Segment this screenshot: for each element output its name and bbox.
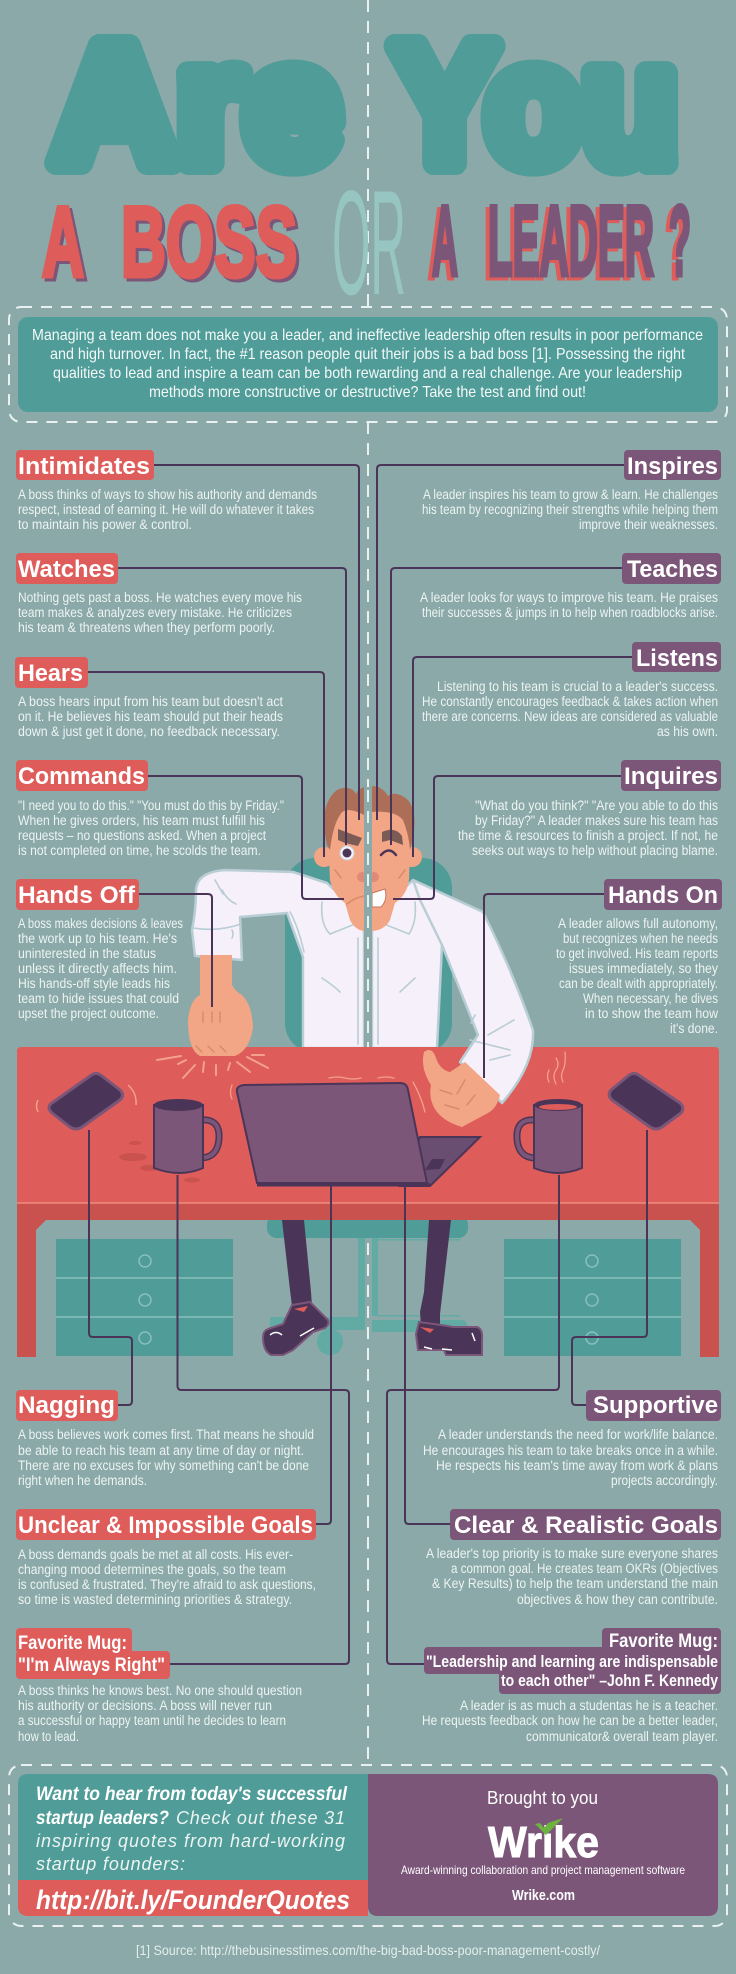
title: A Leader?: A bbox=[428, 188, 454, 299]
leader: hands on: A leader allows full autonomy, bbox=[558, 916, 718, 931]
boss: unclear and impossible goals: changing mood determines the goals, so the team bbox=[18, 1562, 286, 1577]
legs and shoes bbox=[263, 1220, 482, 1355]
center gutter bbox=[364, 787, 372, 1049]
boss: favorite mug: "I'm Always Right" bbox=[18, 1655, 165, 1676]
leader: inspires bbox=[422, 450, 721, 532]
boss: hands off: team to hide issues that could bbox=[18, 991, 179, 1006]
icon: fist with impact marks bbox=[157, 955, 268, 1078]
leader: clear and realistic goals: Clear & Realistic Goals bbox=[454, 1512, 718, 1539]
boss: commands: "I need you to do this." "You must do this by Friday." bbox=[18, 798, 284, 813]
title: A Boss: BOSS bbox=[121, 186, 297, 297]
link: http://bit.ly/FounderQuotes bbox=[36, 1885, 350, 1915]
boss: commands: When he gives orders, his team must fulfill his bbox=[18, 813, 265, 828]
boss: nagging: be able to reach his team at any time of day or night. bbox=[18, 1443, 304, 1458]
leader: favorite mug: Favorite Mug: bbox=[609, 1631, 718, 1652]
connector lines bbox=[88, 465, 647, 1664]
boss: hears: Hears bbox=[18, 660, 83, 687]
leader: hands on: issues immediately, so they bbox=[569, 961, 718, 976]
boss: hears bbox=[15, 657, 283, 739]
leader: clear and realistic goals bbox=[426, 1509, 721, 1607]
boss: nagging: right when he demands. bbox=[18, 1473, 147, 1488]
leader: teaches bbox=[420, 553, 721, 620]
title: Are You: You bbox=[392, 10, 678, 200]
leader: inquires: Inquires bbox=[624, 763, 718, 790]
boss: hands off: upset the project outcome. bbox=[18, 1006, 159, 1021]
boss: intimidates: respect, instead of earning it. He will do whatever it takes bbox=[18, 502, 314, 517]
boss: intimidates: A boss thinks of ways to show his authority and demands bbox=[18, 487, 317, 502]
boss: commands: requests – no questions asked. When a project bbox=[18, 828, 266, 843]
sponsor bbox=[368, 1774, 718, 1916]
boss: hands off: His hands-off style leads his bbox=[18, 976, 170, 991]
source note: [1] Source: http://thebusinesstimes.com/the-big-bad-boss-poor-management-costly/ bbox=[136, 1942, 600, 1958]
icon: left phone bbox=[36, 1074, 136, 1129]
title: Are You bbox=[52, 10, 678, 200]
call to action: inspiring quotes from hard-working bbox=[36, 1831, 345, 1851]
boss: watches bbox=[16, 553, 302, 635]
boss: intimidates: Intimidates bbox=[18, 453, 150, 480]
boss: hears: down & just get it done, no feedback necessary. bbox=[18, 724, 280, 739]
boss: unclear and impossible goals: is confused & frustrated. They're afraid to ask questions, bbox=[18, 1577, 316, 1592]
icon: laptop bbox=[230, 1077, 480, 1186]
boss: unclear and impossible goals: Unclear & Impossible Goals bbox=[18, 1512, 313, 1539]
logo: Wrike: Wrike bbox=[488, 1818, 599, 1867]
leader: inspires: Inspires bbox=[627, 453, 718, 480]
boss: commands bbox=[16, 760, 284, 858]
sponsor: Award-winning collaboration and project management software bbox=[401, 1863, 685, 1877]
icon: right phone bbox=[609, 1074, 683, 1129]
leader: hands on: it's done. bbox=[670, 1021, 718, 1036]
leader: listens: Listens bbox=[636, 645, 718, 672]
panel: introduction: methods more constructive or destructive? Take the test and find out! bbox=[149, 384, 586, 401]
icon: thumbs hand bbox=[423, 1050, 500, 1127]
icon: left mug bbox=[154, 1099, 219, 1173]
boss: watches: his team & threatens when they perform poorly. bbox=[18, 620, 275, 635]
leader: clear and realistic goals: objectives & how they can contribute. bbox=[517, 1592, 718, 1607]
call to action: startup leaders? bbox=[36, 1808, 169, 1829]
boss: nagging bbox=[16, 1390, 314, 1488]
text: OR bbox=[332, 159, 406, 326]
boss: unclear and impossible goals: so time is wasted determining priorities & strategy. bbox=[18, 1592, 292, 1607]
call to action: Want to hear from today's successful bbox=[36, 1784, 348, 1805]
boss: favorite mug: his authority or decisions. A boss will never run bbox=[18, 1698, 272, 1713]
boss: watches: Nothing gets past a boss. He watches every move his bbox=[18, 590, 302, 605]
title: A Leader? bbox=[428, 185, 691, 299]
leader: supportive: projects accordingly. bbox=[611, 1473, 718, 1488]
leader: hands on bbox=[556, 879, 722, 1036]
leader: listens bbox=[422, 642, 721, 739]
text: ? bbox=[665, 188, 687, 299]
boss: favorite mug: Favorite Mug: bbox=[18, 1633, 127, 1654]
sponsor: Brought to you bbox=[487, 1788, 598, 1808]
call to action: startup founders: bbox=[36, 1854, 185, 1874]
desk bbox=[17, 1047, 719, 1357]
boss: nagging: A boss believes work comes first. That means he should bbox=[18, 1427, 314, 1442]
leader: inquires: "What do you think?" "Are you able to do this bbox=[475, 798, 718, 813]
leader: inquires bbox=[458, 760, 721, 858]
boss: hands off: A boss makes decisions & leaves bbox=[18, 916, 183, 931]
leader: supportive: Supportive bbox=[593, 1392, 718, 1419]
boss: hears: on it. He believes his team should put their heads bbox=[18, 709, 283, 724]
boss: hands off: the work up to his team. He's bbox=[18, 931, 177, 946]
title: Are You: Are bbox=[52, 10, 340, 200]
icon: right mug bbox=[517, 1052, 582, 1173]
illustration: boss and leader at desk bbox=[17, 786, 719, 1357]
boss: unclear and impossible goals: A boss demands goals be met at all costs. His ever- bbox=[18, 1547, 293, 1562]
panel: footer bbox=[9, 1765, 727, 1926]
leader: hands on: in to show the team how bbox=[585, 1006, 718, 1021]
boss: watches: Watches bbox=[18, 556, 115, 583]
boss: nagging: There are no excuses for why something can't be done bbox=[18, 1458, 309, 1473]
title: A Boss: A bbox=[45, 189, 87, 300]
boss: favorite mug: A boss thinks he knows best. No one should question bbox=[18, 1683, 302, 1698]
leader: listens: as his own. bbox=[657, 724, 718, 739]
leader: supportive bbox=[423, 1390, 721, 1488]
boss: hands off bbox=[16, 879, 183, 1021]
boss: hands off: Hands Off bbox=[18, 882, 136, 909]
leader: hands on: When necessary, he dives bbox=[583, 991, 718, 1006]
boss: commands: is not completed on time, he scolds the team. bbox=[18, 843, 261, 858]
title: A Leader?: A bbox=[432, 185, 458, 296]
title: A Boss bbox=[42, 186, 300, 300]
boss: intimidates: to maintain his power & control. bbox=[18, 517, 192, 532]
chair bbox=[267, 858, 468, 1355]
leader: hands on: Hands On bbox=[608, 882, 718, 909]
leader: favorite mug bbox=[422, 1628, 721, 1744]
sponsor: Wrike.com bbox=[512, 1887, 575, 1904]
boss: favorite mug: a successful or happy team until he decides to learn bbox=[18, 1713, 286, 1728]
call to action: Check out these 31 bbox=[176, 1808, 345, 1828]
boss: favorite mug: how to lead. bbox=[18, 1729, 79, 1744]
leader: favorite mug: communicator& overall team player. bbox=[526, 1729, 718, 1744]
boss: unclear and impossible goals bbox=[16, 1509, 316, 1607]
boss: hands off: unless it directly affects him. bbox=[18, 961, 177, 976]
title: A Boss: A bbox=[42, 186, 84, 297]
boss: hands off: uninterested in the status bbox=[18, 946, 156, 961]
boss: favorite mug bbox=[16, 1628, 302, 1744]
man's shirt bbox=[192, 870, 442, 1048]
boss: intimidates bbox=[16, 450, 317, 532]
boss: nagging: Nagging bbox=[18, 1392, 115, 1419]
boss: watches: team makes & analyzes every mistake. He criticizes bbox=[18, 605, 292, 620]
leader: teaches: Teaches bbox=[627, 556, 718, 583]
text: ? bbox=[669, 185, 691, 296]
call to action bbox=[18, 1774, 368, 1880]
leader: inspires: improve their weaknesses. bbox=[579, 517, 718, 532]
man's right arm bbox=[413, 880, 533, 1103]
head bbox=[314, 786, 422, 931]
panel: introduction bbox=[9, 307, 727, 422]
drawers bbox=[56, 1239, 681, 1356]
boss: commands: Commands bbox=[18, 763, 145, 790]
title: A Boss: BOSS bbox=[124, 189, 300, 300]
boss: hears: A boss hears input from his team but doesn't act bbox=[18, 694, 283, 709]
